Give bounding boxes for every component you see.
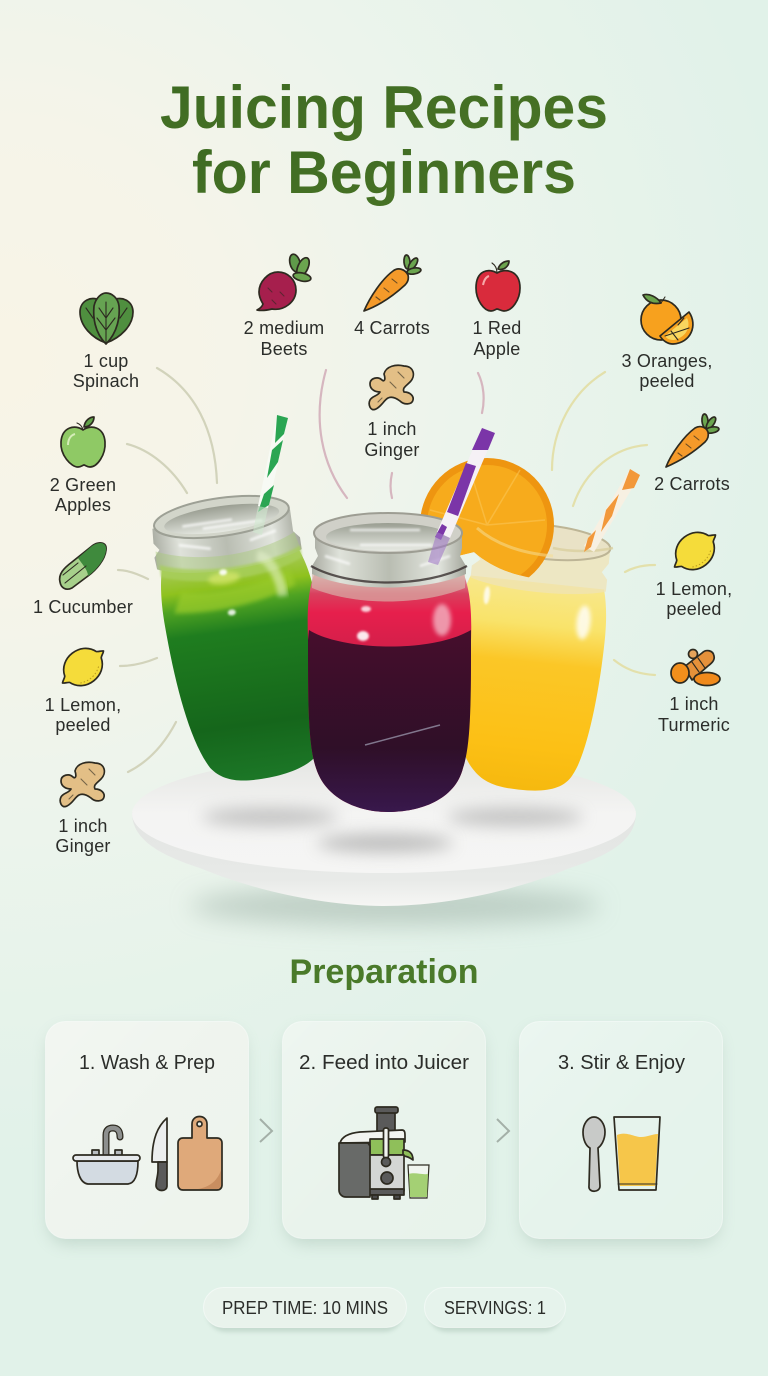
label: carrots right: 2 Carrots [654, 474, 730, 494]
icon: carrot centre [364, 255, 421, 311]
red beet juice jar [308, 428, 495, 812]
label: red apple: 1 Red [472, 318, 522, 338]
title: for Beginners [192, 139, 576, 206]
icon: knife [152, 1118, 167, 1190]
panel: step 3 [520, 1022, 722, 1244]
label: carrots centre: 4 Carrots [354, 318, 430, 338]
label: beets: Beets [260, 339, 308, 359]
step 3 title: 3. Stir & Enjoy [558, 1052, 685, 1074]
label: ginger centre: Ginger [364, 440, 420, 460]
icon: lemon [52, 637, 114, 697]
icon: sink [73, 1128, 140, 1184]
plate with juice shadows [132, 755, 636, 926]
icon: lemon right [664, 521, 726, 581]
heading: preparation: Preparation [290, 953, 478, 991]
icon: juicer [339, 1107, 429, 1199]
label: turmeric: Turmeric [658, 715, 730, 735]
step 1 title: 1. Wash & Prep [79, 1052, 215, 1074]
label: turmeric: 1 inch [669, 694, 719, 714]
label: oranges: peeled [639, 371, 695, 391]
panel: step 1 [46, 1022, 248, 1244]
label: spinach: 1 cup [83, 351, 129, 371]
title: Juicing Recipes [160, 74, 608, 141]
panel: step 2 [282, 1022, 486, 1244]
label: red apple: Apple [473, 339, 521, 359]
label: cucumber: 1 Cucumber [33, 597, 133, 617]
label: lemon right: peeled [666, 599, 722, 619]
icon: ginger centre [369, 365, 413, 410]
arrow: step 1 to 2 [260, 1119, 272, 1142]
icon: turmeric [671, 650, 720, 686]
connector curves [118, 368, 655, 772]
icon: juice glass [614, 1117, 660, 1190]
purple straw [428, 428, 495, 565]
green straw [253, 415, 288, 535]
orange slice [421, 458, 554, 578]
icon: spoon [583, 1117, 605, 1191]
badge: servings: SERVINGS: 1 [444, 1298, 546, 1318]
label: green apples: Apples [55, 495, 111, 515]
icon: orange [641, 294, 693, 344]
label: ginger left: Ginger [55, 836, 111, 856]
label: lemon left: peeled [55, 715, 111, 735]
badge: prep time [204, 1288, 406, 1332]
step 2 title: 2. Feed into Juicer [299, 1052, 469, 1074]
title [160, 74, 608, 206]
label: spinach: Spinach [73, 371, 139, 391]
label: ginger centre: 1 inch [367, 419, 417, 439]
yellow juice jar [420, 458, 640, 797]
label: lemon right: 1 Lemon, [656, 579, 732, 599]
badge: prep time: PREP TIME: 10 MINS [222, 1298, 388, 1318]
icon: ginger left [60, 762, 104, 807]
icon: spinach [80, 293, 133, 344]
label: oranges: 3 Oranges, [621, 351, 713, 371]
icon: red apple [476, 261, 520, 311]
label: beets: 2 medium [244, 318, 324, 338]
label: green apples: 2 Green [50, 475, 116, 495]
label: ginger left: 1 inch [58, 816, 108, 836]
badge: servings [424, 1288, 566, 1332]
green juice jar [147, 415, 340, 789]
icon: carrot right [666, 414, 719, 467]
arrow: step 2 to 3 [497, 1119, 509, 1142]
icon: cutting board [178, 1116, 222, 1190]
icon: green apple [61, 417, 105, 467]
label: lemon left: 1 Lemon, [45, 695, 121, 715]
icon: cucumber [60, 543, 106, 589]
orange straw [584, 469, 640, 552]
icon: beet [257, 253, 312, 310]
